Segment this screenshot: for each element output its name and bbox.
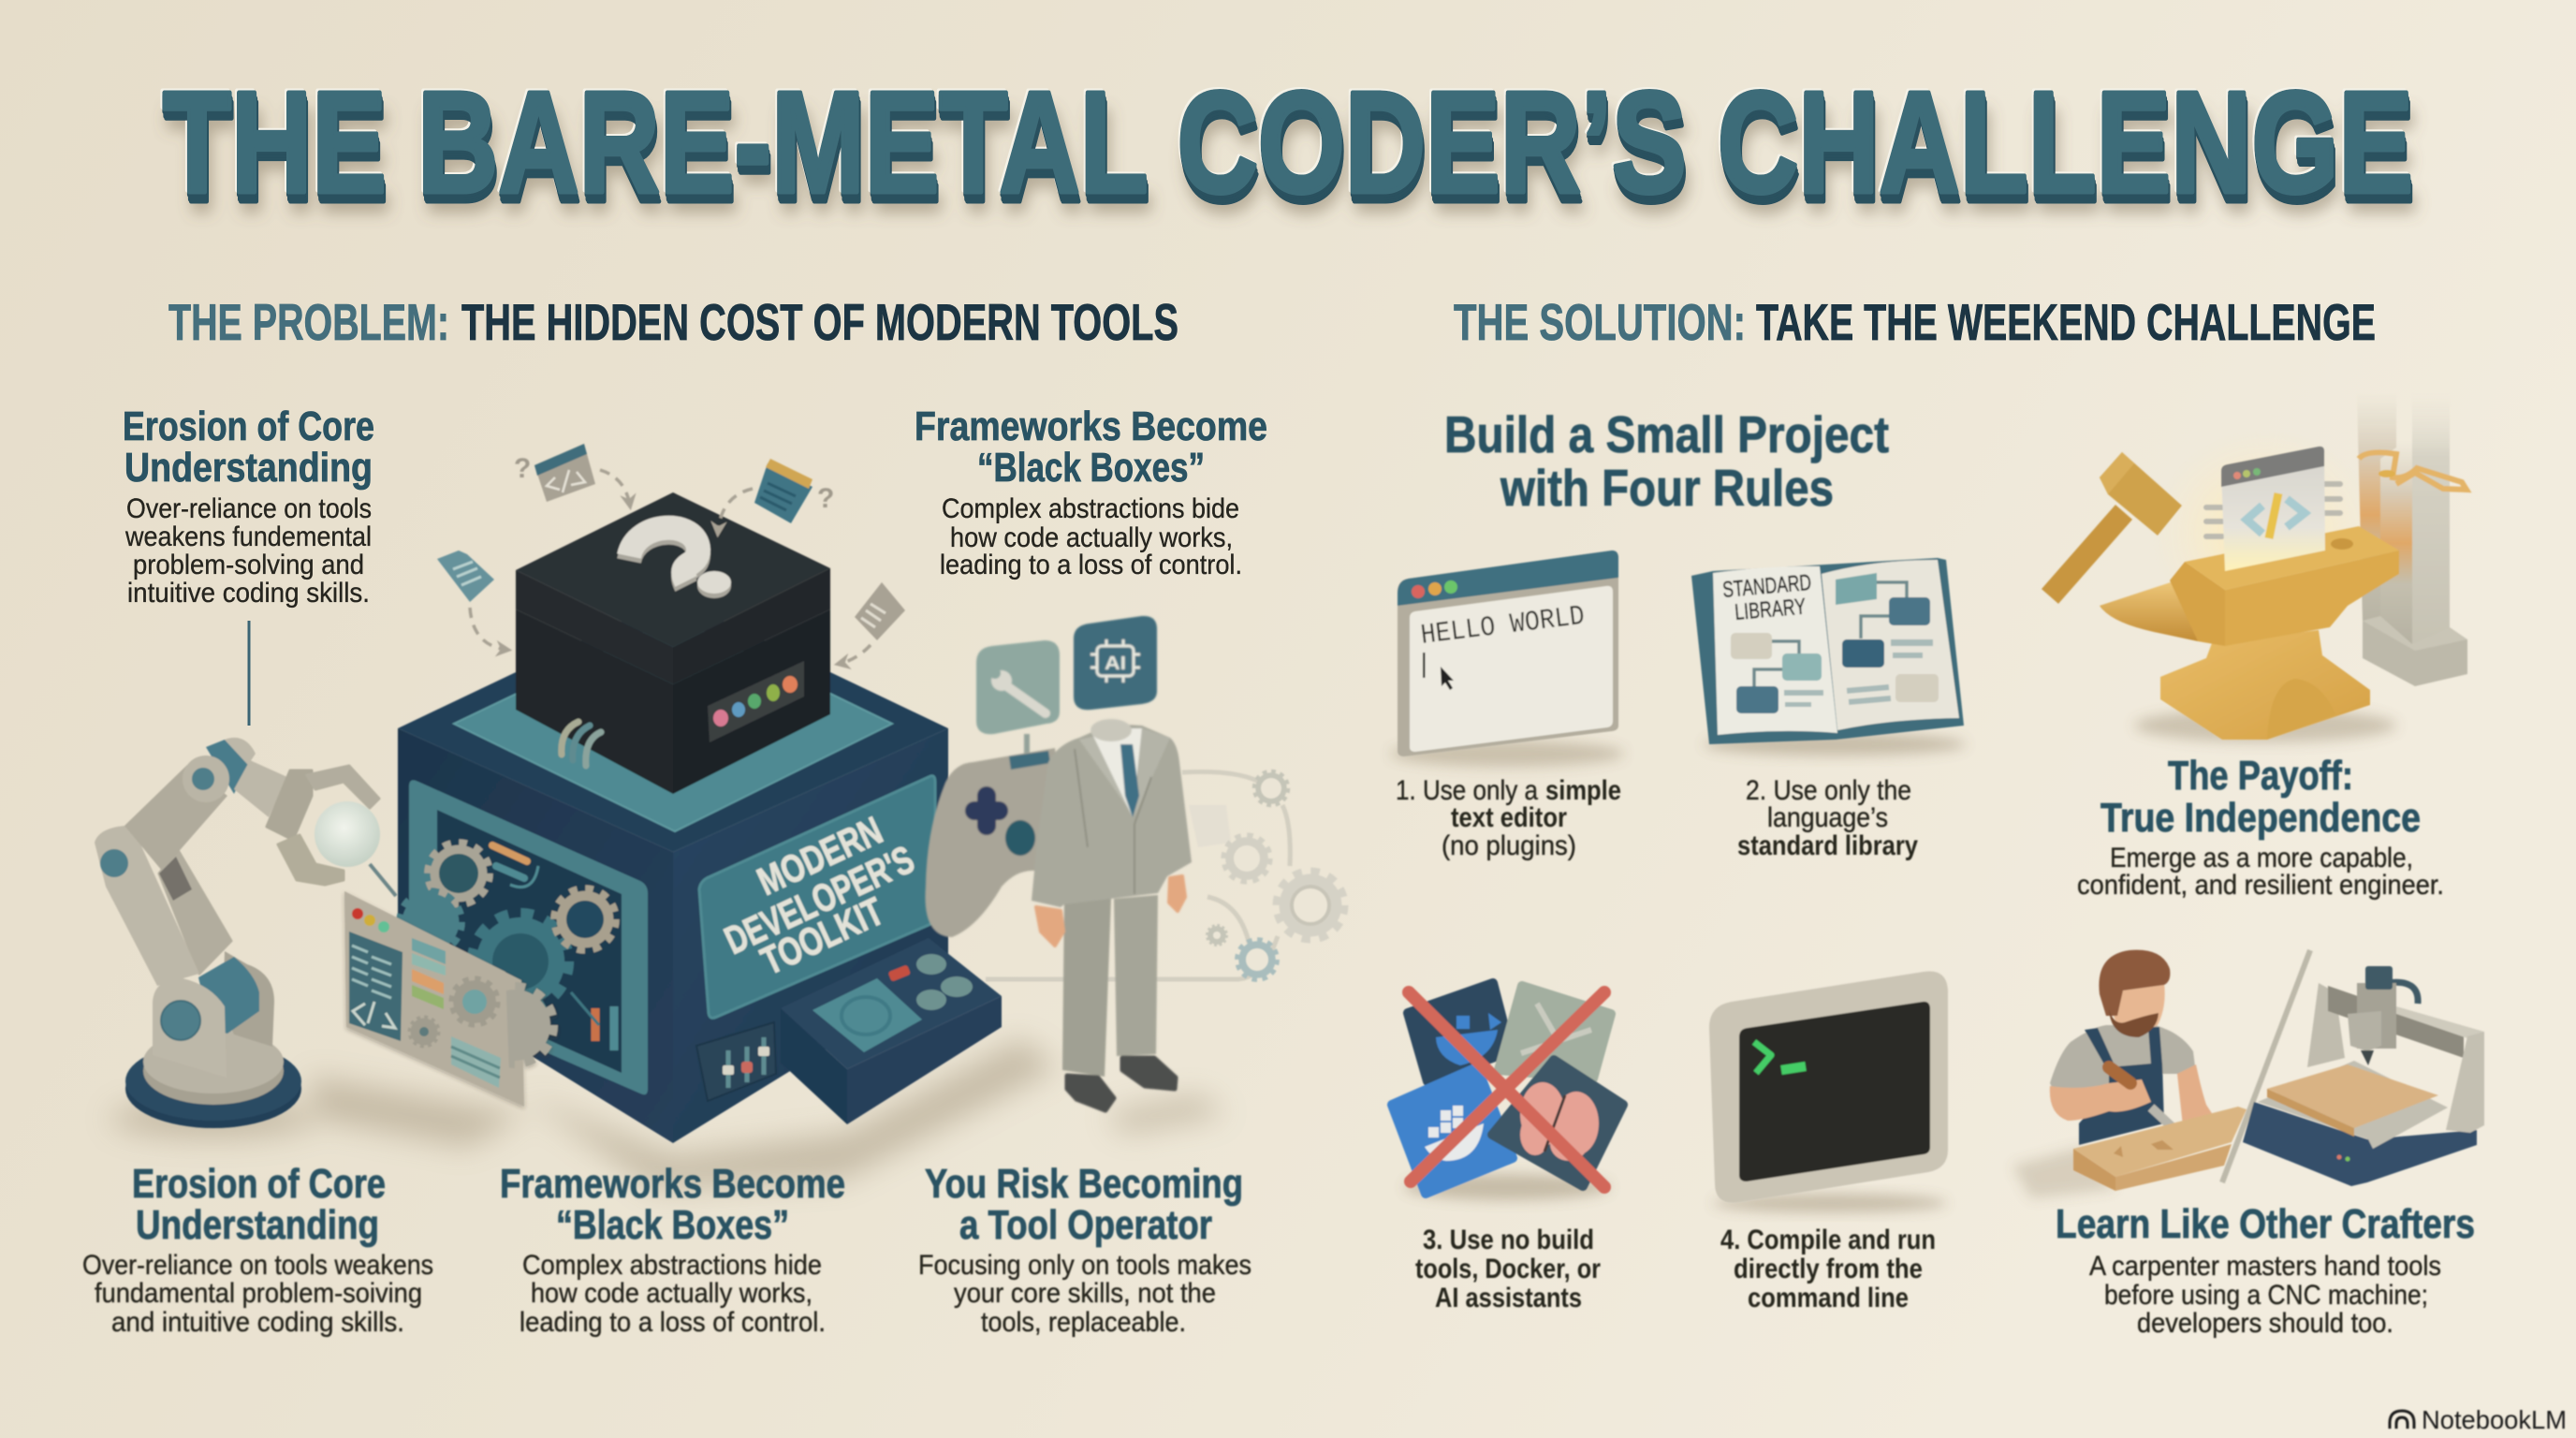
text block: learn like other crafters [2056, 1201, 2475, 1339]
cables [562, 722, 601, 766]
caption: rule 2 [1737, 775, 1918, 861]
trousers [1062, 895, 1158, 1077]
text block: you risk becoming a tool operator: your core skills, not the [954, 1278, 1216, 1309]
question mark [629, 528, 731, 598]
caption: rule 2: 2. Use only the [1746, 775, 1911, 806]
floating grey document [855, 582, 905, 640]
text block: frameworks become black boxes (bottom): Complex abstractions hide [522, 1250, 822, 1281]
control pad [781, 938, 1002, 1124]
text block: erosion of core understanding (top): Over-reliance on tools [126, 493, 372, 524]
caption: rule 3: 3. Use no build [1423, 1225, 1594, 1255]
text block: you risk becoming a tool operator: tools, replaceable. [981, 1307, 1186, 1338]
text block: frameworks become black boxes (bottom): leading to a loss of control. [520, 1307, 826, 1338]
heading: the problem: THE HIDDEN COST OF MODERN TOOLS [461, 293, 1178, 351]
icon: standard library book [1691, 558, 1966, 756]
toolkit label plate: MODERN [751, 808, 889, 903]
text block: erosion of core understanding (top): Erosion of Core [123, 404, 374, 449]
caption: rule 3 [1415, 1225, 1601, 1313]
caption: rule 4 [1720, 1225, 1936, 1313]
text block: erosion of core understanding (bottom): Erosion of Core [132, 1161, 386, 1207]
divider [2222, 950, 2310, 1182]
text block: learn like other crafters: developers should too. [2137, 1308, 2393, 1339]
text block: erosion of core understanding (top): Understanding [124, 445, 373, 491]
ground shadows [110, 1039, 1226, 1189]
gear window [400, 780, 648, 1094]
text block: erosion of core understanding (top): problem-solving and [133, 550, 364, 580]
icon: hello world text editor [1390, 550, 1624, 767]
text block: frameworks become black boxes (top): “Black Boxes” [977, 445, 1205, 491]
text block: the payoff: True Independence [2100, 795, 2421, 841]
arm segments [95, 738, 379, 986]
illustration: carpenter and CNC machine [2012, 950, 2484, 1198]
text block: you risk becoming a tool operator: Focusing only on tools makes [918, 1250, 1251, 1281]
heading: the solution: THE SOLUTION: [1454, 293, 1746, 351]
text block: frameworks become black boxes (bottom) [500, 1161, 845, 1338]
floating teal document [437, 550, 494, 602]
caption: rule 3: tools, Docker, or [1415, 1254, 1601, 1284]
glowing sphere [315, 801, 380, 867]
text block: you risk becoming a tool operator: You Risk Becoming [925, 1161, 1243, 1207]
heading: the problem: THE PROBLEM: [168, 293, 449, 351]
text block: frameworks become black boxes (top) [915, 404, 1267, 580]
text block: you risk becoming a tool operator: a Tool Operator [959, 1202, 1212, 1248]
caption: rule 2: language’s [1767, 802, 1888, 833]
toolkit label plate [699, 776, 935, 1018]
carpenter [2050, 950, 2218, 1145]
heading: build a small project: with Four Rules [1500, 459, 1834, 517]
arm base disc [125, 1030, 301, 1128]
text block: frameworks become black boxes (bottom): Frameworks Become [500, 1161, 845, 1207]
forge pillar [2357, 393, 2467, 686]
text block: the payoff: confident, and resilient engineer. [2077, 870, 2444, 901]
icon: hello world text editor: HELLO WORLD [1419, 601, 1587, 653]
caption: rule 4: directly from the [1734, 1254, 1923, 1284]
caption: rule 2: standard library [1737, 830, 1918, 861]
caption: rule 3: AI assistants [1435, 1283, 1582, 1313]
hands [1036, 876, 1185, 946]
floating blue note and question mark [754, 459, 834, 523]
floating code window and question mark [514, 444, 595, 502]
caption: rule 1 [1396, 775, 1621, 861]
text block: the payoff [2077, 753, 2444, 901]
game controller [926, 748, 1067, 937]
text block: erosion of core understanding (bottom): Understanding [136, 1202, 379, 1248]
text block: erosion of core understanding (bottom) [82, 1161, 433, 1338]
text block: learn like other crafters: before using a CNC machine; [2104, 1280, 2428, 1311]
brand mark: NotebookLM: NotebookLM [2422, 1405, 2567, 1434]
code card on anvil [2185, 447, 2399, 590]
text block: erosion of core understanding (top): intuitive coding skills. [127, 578, 370, 609]
floating code window and question mark: ? [514, 453, 531, 484]
text block: frameworks become black boxes (bottom): “Black Boxes” [556, 1202, 789, 1248]
faded gears and dependency lines [986, 771, 1344, 979]
text block: frameworks become black boxes (top): how code actually works, [950, 522, 1233, 553]
slider panel [696, 1022, 776, 1101]
AI chip tile [1074, 616, 1157, 710]
suit jacket [1032, 719, 1192, 907]
text block: erosion of core understanding (top): weakens fundemental [124, 521, 372, 552]
text block: frameworks become black boxes (top): leading to a loss of control. [940, 550, 1242, 580]
text block: erosion of core understanding (top) [123, 404, 374, 609]
illustration: modern developer's toolkit machine [82, 393, 2567, 1434]
text block: erosion of core understanding (bottom): Over-reliance on tools weakens [82, 1250, 433, 1281]
text block: learn like other crafters: Learn Like Other Crafters [2056, 1201, 2475, 1247]
icon: terminal window [1709, 971, 1948, 1212]
arm fork and joint [153, 951, 274, 1078]
toolkit label plate: DEVELOPER'S [718, 837, 920, 962]
black box [516, 492, 830, 794]
caption: rule 1: text editor [1451, 802, 1567, 833]
heading: build a small project [1444, 405, 1889, 517]
text block: the payoff: Emerge as a more capable, [2110, 843, 2413, 873]
text block: frameworks become black boxes (top): Frameworks Become [915, 404, 1267, 449]
icon: standard library book: LIBRARY [1734, 594, 1807, 625]
heading: the problem [168, 293, 1178, 351]
connector line [247, 621, 251, 726]
text block: learn like other crafters: A carpenter masters hand tools [2089, 1251, 2441, 1282]
teal top plate [454, 618, 892, 831]
floating code panel with gears [344, 891, 553, 1107]
caption: rule 1: (no plugins) [1442, 830, 1576, 861]
CNC machine [2243, 966, 2484, 1186]
text block: you risk becoming a tool operator [918, 1161, 1251, 1338]
shoes [1067, 1058, 1176, 1110]
wood block [2073, 1107, 2247, 1191]
text block: erosion of core understanding (bottom): and intuitive coding skills. [111, 1307, 404, 1338]
illustration: anvil forging code [2050, 393, 2467, 742]
heading: the solution [1454, 293, 2376, 351]
caption: rule 1: simple [1545, 775, 1621, 806]
illustration: robot arm holding a sphere [95, 738, 396, 1128]
illustration: headless suited tool operator [926, 616, 1192, 1110]
floating blue note and question mark: ? [817, 483, 834, 514]
AI chip tile: AI [1105, 653, 1126, 674]
wrench tile [976, 640, 1060, 760]
toolkit label plate: TOOLKIT [754, 888, 890, 983]
text block: frameworks become black boxes (top): Complex abstractions bide [942, 493, 1239, 524]
icon: standard library book: STANDARD [1721, 570, 1812, 603]
icon: crossed-out tools, docker and AI [1392, 983, 1623, 1200]
text block: the payoff: The Payoff: [2168, 753, 2353, 799]
text block: erosion of core understanding (bottom): fundamental problem-soiving [95, 1278, 422, 1309]
machine base [398, 597, 948, 1143]
caption: rule 4: 4. Compile and run [1720, 1225, 1936, 1255]
caption: rule 4: command line [1748, 1283, 1909, 1313]
dashed arrows into the black box [470, 470, 871, 664]
hammer [2050, 452, 2182, 596]
text block: frameworks become black boxes (bottom): how code actually works, [531, 1278, 812, 1309]
heading: build a small project: Build a Small Project [1444, 405, 1889, 463]
caption: rule 1: 1. Use only a [1396, 775, 1538, 806]
anvil body [2100, 550, 2399, 740]
status lights [708, 661, 804, 742]
